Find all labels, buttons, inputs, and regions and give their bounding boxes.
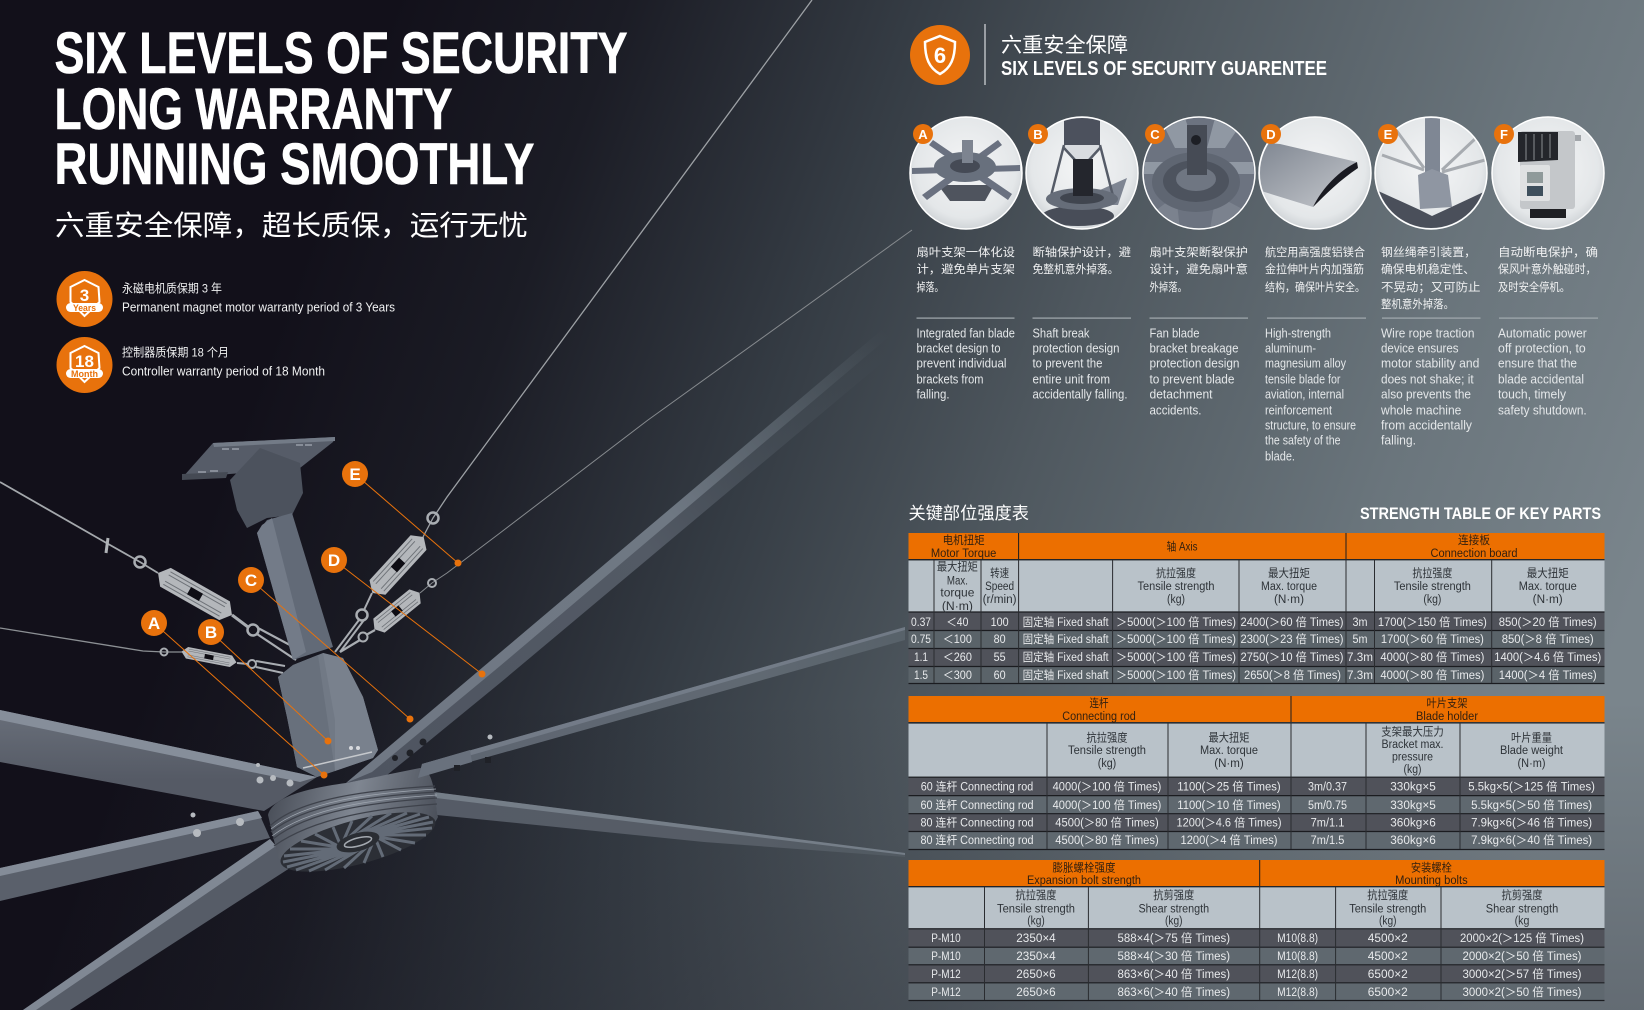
table 1 rows: ＞5000(＞100 倍 Times) [1116,615,1236,629]
table 2 rows: 4500(＞80 倍 Times) [1055,815,1159,829]
chinese description A [916,245,1016,294]
table 2 column headers: Bracket max. [1382,739,1444,751]
english description F: ensure that the [1498,356,1577,370]
table 1 rows: 1400(＞4.6 倍 Times) [1494,650,1601,664]
english description B: protection design [1032,342,1120,356]
english description C: detachment [1150,388,1213,402]
warranty text: 永磁电机质保期 3 年 [122,280,222,296]
table 2 rows: 7.9kg×6(＞40 倍 Times) [1471,833,1592,847]
table 1 rows: 7.3m [1347,652,1373,664]
chinese description E: 确保电机稳定性、 [1381,262,1475,276]
letter badges on photos: C [1150,127,1160,142]
table 3: expansion bolt, mounting bolts [908,860,1604,1000]
english description D: High-strength [1265,326,1331,340]
table 1 rows [911,615,1601,682]
english description B: to prevent the [1032,356,1103,370]
english description D: aviation, internal [1265,388,1344,402]
table 3 column headers: 抗拉强度 [1016,888,1057,902]
main title: LONG WARRANTY [54,77,452,142]
english description D [1265,326,1356,464]
main title [54,21,628,197]
table 3 orange header [1027,860,1468,887]
table 3 rows: P-M12 [931,969,961,981]
warranty item: 18 month [56,337,325,393]
wire: upper left [0,482,303,660]
circle photo B: shaft break protection [1026,117,1138,229]
wire: lower left [0,628,285,673]
table 1 rows: 固定轴 Fixed shaft [1023,650,1109,664]
english description B: accidentally falling. [1032,388,1128,402]
table 1 column headers: (kg) [1167,594,1185,606]
chinese description B: 断轴保护设计，避 [1032,245,1132,259]
english description E: does not shake; it [1381,372,1474,386]
chinese description D: 航空用高强度铝镁合 [1265,245,1365,259]
table 2 rows: 4000(＞100 倍 Times) [1053,780,1162,794]
english description A: Integrated fan blade [916,326,1015,340]
table 1 column headers: (N·m) [1274,594,1304,606]
main title: RUNNING SMOOTHLY [54,132,534,197]
icon: shield 6: 6 [934,43,946,68]
english description D: reinforcement [1265,404,1332,418]
chinese description B: 免整机意外掉落。 [1032,262,1118,276]
table 1 rows: 100 [991,617,1009,629]
callout C [238,567,413,722]
table 1 orange header: 连接板 [1458,533,1490,547]
table 2 column headers: 叶片重量 [1511,731,1552,745]
chinese description E: 整机意外掉落。 [1381,297,1454,311]
table 2 rows: 1100(＞10 倍 Times) [1177,798,1281,812]
table 1 rows: 60 [994,670,1006,682]
english description F: off protection, to [1498,342,1586,356]
table 1 rows: 1700(＞150 倍 Times) [1378,615,1487,629]
table 3 column headers: (kg) [1379,916,1397,928]
table 3 column headers: Shear strength [1486,903,1558,915]
table 3 rows: 4500×2 [1368,951,1408,963]
letter badges on photos: F [1500,127,1508,142]
table 1 rows: 850(＞20 倍 Times) [1499,615,1597,629]
english description F: blade accidental [1498,372,1584,386]
table 1 column headers: 最大扭矩 [1268,566,1310,580]
table 1 column headers: (r/min) [983,594,1017,606]
table 1 rows: ＞5000(＞100 倍 Times) [1116,632,1236,646]
table 3 rows: 2350×4 [1016,951,1056,963]
table 1 orange header: 电机扭矩 [943,533,985,547]
table 2 rows: 7.9kg×6(＞46 倍 Times) [1471,815,1592,829]
table 2 rows [920,780,1595,847]
english description C [1150,326,1240,418]
section heading text: 六重安全保障 [1001,34,1128,57]
warranty text [122,346,325,378]
table 2 orange header: 连杆 [1090,696,1109,710]
table 2 orange header [1062,696,1478,723]
table 1 column headers: (N·m) [942,601,973,613]
table 1 orange header [931,533,1518,560]
english description D: tensile blade for [1265,372,1340,386]
chinese description A: 计，避免单片支架 [916,262,1015,276]
callout B: B [205,623,217,642]
english description E: device ensures [1381,342,1458,356]
english description B [1032,326,1128,402]
wire: upper right [335,0,812,652]
table 1 rows: ＜300 [943,670,972,682]
table 1 rows: 55 [994,652,1006,664]
table 2 column headers: (kg) [1098,758,1116,770]
callout A [141,610,327,778]
chinese description A: 扇叶支架一体化设 [916,245,1016,259]
english description A: bracket design to [916,342,1001,356]
fan illustration [0,0,945,1010]
table 2 orange header: Blade holder [1416,711,1478,723]
table 2 rows: 60 连杆 Connecting rod [920,798,1034,812]
chinese description E: 钢丝绳牵引装置， [1381,245,1476,259]
english description F: Automatic power [1498,326,1587,340]
table 2 rows: 7m/1.1 [1311,817,1344,829]
table 1 rows: 2300(＞23 倍 Times) [1240,632,1344,646]
table 2 rows: 360kg×6 [1390,817,1436,829]
warranty text: Permanent magnet motor warranty period of 3 Years [122,300,395,314]
circle photo E: wire rope device [1375,117,1488,232]
strength table headings: STRENGTH TABLE OF KEY PARTS [1360,504,1601,523]
table 3 rows: 2650×6 [1016,969,1056,981]
table 1 column headers: Tensile strength [1394,581,1471,593]
table 1 orange header: Motor Torque [931,548,996,560]
table 1 rows: ＞5000(＞100 倍 Times) [1116,650,1236,664]
table 2 orange header: 叶片支架 [1426,697,1468,710]
table 2 column headers: 最大扭矩 [1208,731,1250,745]
table 2 rows: 80 连杆 Connecting rod [920,833,1034,847]
table 3 rows: M10(8.8) [1277,933,1318,945]
table 1 column headers: (N·m) [1533,594,1563,606]
icon: 18 month badge: Month [71,369,98,379]
table 2 orange header: Connecting rod [1062,711,1136,723]
wire: lower right [340,230,912,652]
table 2 backgrounds [908,696,1604,850]
table 2 column headers: 支架最大压力 [1381,725,1444,739]
chinese description C [1150,245,1248,294]
table 3 rows: 863×6(＞40 倍 Times) [1118,985,1230,999]
table 1 rows: 1700(＞60 倍 Times) [1381,632,1484,646]
table 1 rows: 2650(＞8 倍 Times) [1244,668,1341,682]
table 1 rows: 2750(＞10 倍 Times) [1240,650,1344,664]
section header: six levels [910,24,1327,85]
english description B: Shaft break [1032,326,1090,340]
table 1 column headers: Speed [985,581,1014,593]
english description F [1498,326,1587,418]
chinese description F [1498,245,1598,294]
table 3 rows: 6500×2 [1368,969,1408,981]
table 3 column headers: (kg) [1165,916,1183,928]
section heading text: SIX LEVELS OF SECURITY GUARENTEE [1001,58,1327,80]
english description E: falling. [1381,434,1416,448]
strength table headings [908,504,1601,523]
table 2 rows: 360kg×6 [1390,835,1436,847]
english description B: entire unit from [1032,372,1110,386]
circle photo D: blade section [1258,117,1371,229]
table 2 column headers: (N·m) [1214,758,1244,770]
table 1 rows: 0.37 [911,617,931,629]
table 2 rows: 3m/0.37 [1308,782,1347,794]
english description D: the safety of the [1265,434,1341,448]
blade: left lower [0,811,270,901]
table 3 rows: 3000×2(＞50 倍 Times) [1462,985,1582,999]
table 1 column headers: 抗拉强度 [1412,566,1453,580]
table 1 rows: 1.5 [914,670,928,682]
chinese description E [1381,245,1480,311]
chinese description D: 金拉伸叶片内加强筋 [1265,262,1364,276]
table 1 rows: ＜40 [946,617,968,629]
table 3 rows: 588×4(＞75 倍 Times) [1118,931,1230,945]
warranty text: Controller warranty period of 18 Month [122,364,325,378]
callout C: C [245,571,257,590]
english description C: bracket breakage [1150,342,1239,356]
table 3 rows: 863×6(＞40 倍 Times) [1118,967,1230,981]
english description F: safety shutdown. [1498,404,1587,418]
mounting plate [182,437,335,480]
table 3 rows: 4500×2 [1368,933,1408,945]
table 3 orange header: Mounting bolts [1395,875,1468,887]
chinese subtitle: 六重安全保障，超长质保，运行无忧 [55,210,528,241]
table 1 column headers: (kg) [1423,594,1442,606]
icon: 3 years badge [56,271,112,327]
support post [257,513,333,660]
table 3 rows: 2650×6 [1016,987,1056,999]
english description E: from accidentally [1381,418,1473,432]
english description F: touch, timely [1498,388,1567,402]
chinese description D [1265,245,1365,294]
table 3 rows: 588×4(＞30 倍 Times) [1118,949,1230,963]
icon: 18 month badge [56,337,112,393]
warranty item: 3 years [56,271,395,327]
table 2 rows: 1200(＞4 倍 Times) [1180,833,1278,847]
english description C: to prevent blade [1150,372,1235,386]
table 1 column headers: 抗拉强度 [1156,566,1196,580]
table 3 column headers: 抗剪强度 [1502,888,1543,902]
table 3 backgrounds [908,860,1604,1000]
chinese description F: 及时安全停机。 [1498,280,1570,294]
table 2 rows: 5.5kg×5(＞125 倍 Times) [1468,780,1595,794]
blade: top right [346,289,945,783]
table 1 rows: 2400(＞60 倍 Times) [1240,615,1344,629]
table 3 column headers: (kg) [1027,916,1045,928]
table 3 orange header: Expansion bolt strength [1027,875,1141,887]
table 1 orange header: 轴 Axis [1166,540,1198,554]
table 1 column headers: torque [940,588,974,600]
feature column D [1265,245,1366,464]
table 3 rows: M12(8.8) [1277,987,1318,999]
letter badges on photos: D [1266,127,1276,142]
english description A [916,326,1015,402]
callout leader lines [141,461,485,778]
callout D: D [328,551,340,570]
english description E: Wire rope traction [1381,326,1475,340]
table 2 column headers: Tensile strength [1068,745,1146,757]
main title: SIX LEVELS OF SECURITY [54,21,628,86]
english description C: Fan blade [1150,326,1200,340]
chinese description E: 不晃动；又可防止 [1381,280,1480,294]
letter badges on photos [913,124,1514,144]
letter badges on photos: E [1384,127,1393,142]
circle photo F: controller [1492,117,1604,229]
icon: 3 years badge: 3 [80,286,89,305]
table 2 rows: 4500(＞80 倍 Times) [1055,833,1159,847]
english description C: accidents. [1150,404,1202,418]
table 3 rows: 2350×4 [1016,933,1056,945]
table 2 rows: 330kg×5 [1390,800,1436,812]
english description A: prevent individual [916,356,1006,370]
table 3 rows: 3000×2(＞57 倍 Times) [1462,967,1582,981]
table 1 column headers: Tensile strength [1138,581,1214,593]
warranty text [122,280,395,314]
table 2 rows: 1200(＞4.6 倍 Times) [1176,815,1282,829]
table 3 column headers: 抗剪强度 [1153,888,1195,902]
feature column E [1380,245,1480,448]
table 3 rows: 6500×2 [1368,987,1408,999]
feature column B [1032,245,1132,402]
table 1 rows: 固定轴 Fixed shaft [1023,668,1109,682]
table 1 column headers: 最大扭矩 [937,560,978,574]
table 1 rows: ＜260 [943,652,972,664]
english description A: falling. [916,388,950,402]
chinese description D: 结构，确保叶片安全。 [1265,280,1365,294]
feature column A [916,245,1016,402]
table 2 column headers: Max. torque [1200,745,1258,757]
table 3 column headers: Shear strength [1138,903,1209,915]
table 1 rows: 1.1 [914,652,928,664]
table 3 rows [931,931,1584,999]
table 3 column headers: Tensile strength [997,903,1075,915]
letter badges on photos: A [918,127,928,142]
chinese description F: 保风叶意外触碰时， [1498,262,1596,276]
table 2 column headers: (N·m) [1518,758,1546,770]
blade: right [420,627,905,776]
chinese description B [1032,245,1132,276]
chinese description F: 自动断电保护，确 [1498,245,1598,259]
english description D: blade. [1265,450,1295,464]
table 3 column headers [997,888,1558,928]
table 3 rows: P-M10 [931,951,961,963]
section heading text [1001,34,1327,80]
table 2 column headers: pressure [1392,752,1433,764]
motor housing [278,653,378,777]
table 1 backgrounds [908,533,1604,684]
english description A: brackets from [916,372,984,386]
english description E: whole machine [1380,404,1461,418]
blade: left [0,710,317,811]
warranty text: 控制器质保期 18 个月 [122,346,229,360]
table 3 rows: P-M12 [931,987,961,999]
table 3 column headers: Tensile strength [1349,903,1426,915]
table 1 rows: 850(＞8 倍 Times) [1502,632,1594,646]
table 3 orange header: 安装螺栓 [1411,860,1452,874]
feature column C [1150,245,1248,418]
table 2 column headers: (kg) [1404,764,1422,776]
table 1 rows: ＞5000(＞100 倍 Times) [1116,668,1236,682]
table 2 column headers [1068,725,1564,776]
circle photo A: blade bracket [910,117,1022,229]
table 2: connecting rod, blade holder [908,696,1604,850]
table 1 rows: 0.75 [911,634,931,646]
post bracket [230,448,303,528]
table 3 rows: M10(8.8) [1277,951,1318,963]
table 2 column headers: 抗拉强度 [1086,731,1128,745]
table 1 column headers: 最大扭矩 [1527,566,1569,580]
chinese description C: 扇叶支架断裂保护 [1150,245,1248,259]
table 2 rows: 5.5kg×5(＞50 倍 Times) [1471,798,1592,812]
callout B [198,619,331,744]
strength table headings: 关键部位强度表 [908,504,1029,523]
table 1 column headers [937,560,1577,613]
callout D [321,547,485,677]
table 1 rows: 4000(＞80 倍 Times) [1380,668,1485,682]
table 1 rows: 7.3m [1347,670,1373,682]
table 1 rows: 5m [1352,634,1368,646]
table 3 rows: 2000×2(＞50 倍 Times) [1462,949,1582,963]
circle photo C: bracket breakage protection [1143,117,1255,229]
english description E [1380,326,1479,448]
table 1 column headers: 转速 [990,566,1010,580]
icon: shield 6 [910,25,970,85]
hub [190,734,492,884]
table 1 rows: 固定轴 Fixed shaft [1023,632,1109,646]
table 2 rows: 5m/0.75 [1308,800,1347,812]
table 1 rows: 4000(＞80 倍 Times) [1380,650,1485,664]
icon: 18 month badge: 18 [75,352,94,371]
table 3 orange header: 膨胀螺栓强度 [1052,860,1116,874]
icon: 3 years badge: Years [73,303,96,313]
callout A: A [148,614,160,633]
chinese description A: 掉落。 [916,280,944,294]
table 1 rows: 1400(＞4 倍 Times) [1499,668,1597,682]
chinese description C: 外掉落。 [1150,280,1187,294]
english description D: aluminum- [1265,342,1316,356]
table 3 rows: 2000×2(＞125 倍 Times) [1460,931,1584,945]
blade: lower right [434,792,905,857]
table 1 column headers: Max. torque [1261,581,1317,593]
table 1 column headers: Max. [947,576,968,588]
table 2 rows: 7m/1.5 [1311,835,1344,847]
table 2 rows: 330kg×5 [1390,782,1436,794]
table 1 orange header: Connection board [1430,548,1518,560]
table 1 rows: ＜100 [943,634,972,646]
table 3 rows: P-M10 [931,933,961,945]
table 2 rows: 80 连杆 Connecting rod [920,815,1034,829]
blade: bottom [23,839,293,1010]
english description E: motor stability and [1381,356,1479,370]
table 1 column headers: Max. torque [1519,581,1577,593]
table 1 rows: 80 [994,634,1006,646]
english description C: protection design [1150,356,1240,370]
table 3 rows: M12(8.8) [1277,969,1318,981]
table 3 column headers: (kg [1515,916,1529,928]
feature column F [1498,245,1598,418]
chinese description C: 设计，避免扇叶意 [1150,262,1248,276]
table 2 rows: 1100(＞25 倍 Times) [1177,780,1281,794]
english description D: magnesium alloy [1265,356,1347,370]
table 1 rows: 3m [1352,617,1368,629]
english description E: also prevents the [1381,388,1471,402]
table 3 column headers: 抗拉强度 [1367,888,1409,902]
table 1: motor torque, axis, connection board [908,533,1604,684]
letter badges on photos: B [1033,127,1043,142]
table 2 column headers: Blade weight [1500,745,1564,757]
table 2 rows: 60 连杆 Connecting rod [921,780,1033,794]
callout E: E [349,465,361,484]
english description D: structure, to ensure [1265,418,1356,432]
table 1 rows: 固定轴 Fixed shaft [1023,615,1109,629]
callout E [342,461,461,566]
table 2 rows: 4000(＞100 倍 Times) [1053,798,1162,812]
